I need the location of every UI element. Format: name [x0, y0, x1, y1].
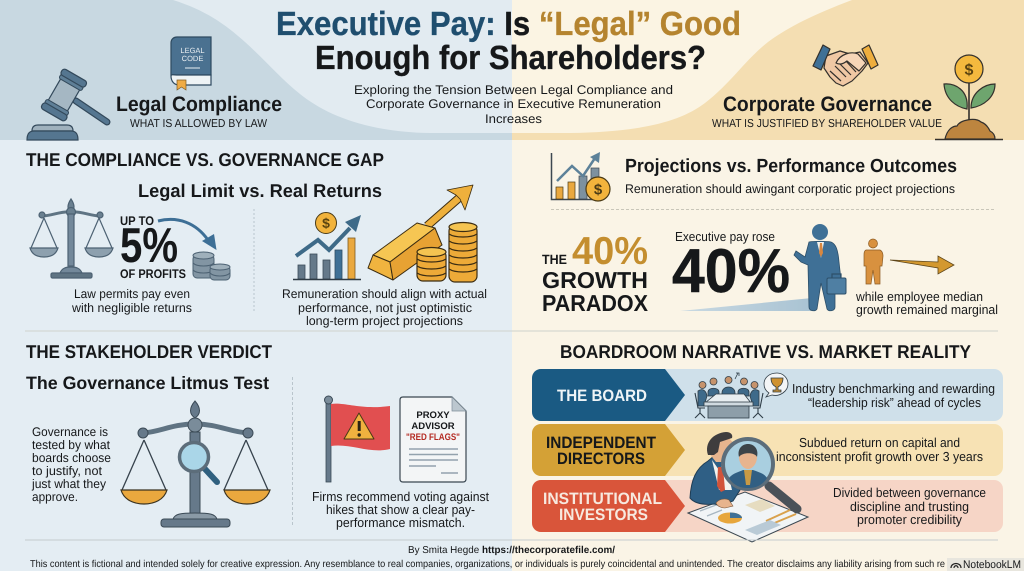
heading: stakeholder verdict: THE STAKEHOLDER VERDICT [26, 341, 273, 362]
icon: growth plant with coin: $ [965, 62, 974, 79]
subheading: governance litmus test: The Governance Litmus Test [26, 373, 269, 393]
heading: projections vs performance: Projections vs. Performance Outcomes [625, 156, 957, 177]
heading: corporate governance: WHAT IS JUSTIFIED BY SHAREHOLDER VALUE [712, 118, 942, 130]
text: governance is tested: Governance is [32, 425, 108, 439]
row: institutional investors [532, 480, 1003, 532]
title: Executive Pay: Is “Legal” Good [276, 6, 741, 43]
heading: corporate governance: Corporate Governance [723, 93, 932, 116]
icon: projections chart: $ [594, 182, 603, 198]
arrow: profits to coins [158, 219, 216, 250]
heading: the 40% growth paradox: THE [542, 252, 567, 267]
row: independent directors: DIRECTORS [557, 450, 645, 468]
panel: the stakeholder verdict [26, 341, 489, 530]
text: governance is tested: approve. [32, 490, 78, 504]
arrow: marginal growth [890, 256, 954, 274]
text: governance is tested: tested by what [32, 438, 111, 452]
text: governance is tested: to justify, not [32, 464, 103, 478]
stat: 40%: 40% [672, 237, 790, 306]
icon: board table [695, 373, 788, 418]
icon: gold coin stacks [417, 222, 477, 282]
text: firms recommend voting: Firms recommend voting against [312, 489, 489, 504]
title: Enough for Shareholders? [315, 40, 706, 77]
title [276, 6, 741, 77]
heading: the 40% growth paradox: 40% [572, 230, 648, 273]
text: executive pay rose: Executive pay rose [675, 229, 775, 244]
callout: up to 5% of profits: UP TO [120, 214, 154, 228]
heading: legal compliance [116, 93, 282, 130]
subtitle: Corporate Governance in Executive Remuneration [366, 97, 661, 111]
icon: rising bar chart with coin: $ [322, 215, 330, 231]
row: the board: “leadership risk” ahead of cycles [808, 395, 981, 410]
text: law permits pay [71, 287, 192, 315]
footer: disclaimer: This content is fictional and intended solely for creative expression. Any resemblance to real companies, organizations, or individuals is purely coincidental and unintended. The creator disclaims any liability arising from such re [30, 559, 945, 570]
heading: the 40% growth paradox [542, 230, 649, 316]
icon: proxy advisor document: PROXY [416, 410, 450, 421]
heading: compliance vs governance gap: THE COMPLIANCE VS. GOVERNANCE GAP [26, 149, 384, 170]
arrow: gold rising [427, 185, 473, 226]
callout: up to 5% of profits: 5% [120, 219, 178, 273]
text: employee median growth: while employee median [855, 289, 983, 304]
icon: gold bar [368, 223, 442, 280]
heading: the 40% growth paradox: GROWTH [542, 267, 648, 293]
icon: balance scale [30, 199, 113, 278]
chart: pay ramp wedge [680, 298, 812, 311]
panel: projections vs performance outcomes [542, 152, 998, 317]
icon: projections chart [552, 152, 610, 201]
row: institutional investors: discipline and trusting [850, 499, 969, 514]
badge: NotebookLM watermark: NotebookLM [963, 559, 1021, 571]
icon: gavel [27, 68, 107, 140]
text: remuneration projections: Remuneration should awingant corporatic project projections [625, 182, 955, 196]
icon: red flag with warning [324, 396, 390, 482]
icon: employee figure [864, 239, 883, 284]
text: remuneration should align: performance, not just optimistic [298, 301, 472, 315]
text: governance is tested: boards choose [32, 451, 111, 465]
icon: legal code book: CODE [182, 54, 203, 63]
text: governance is tested: just what they [31, 477, 107, 491]
icon: proxy advisor document: ADVISOR [411, 421, 455, 432]
subheading: legal limit vs real returns: Legal Limit vs. Real Returns [138, 180, 382, 201]
row: institutional investors: INSTITUTIONAL [543, 490, 662, 508]
heading: corporate governance [712, 93, 942, 130]
footer: byline: By Smita Hegde https://thecorporatefile.com/ [408, 545, 615, 556]
row: the board: Industry benchmarking and rewarding [792, 381, 995, 396]
text: law permits pay: with negligible returns [71, 301, 192, 315]
subtitle: Increases [485, 112, 542, 126]
icon: analyst with magnifier over report [688, 432, 808, 542]
callout: up to 5% of profits: OF PROFITS [120, 267, 186, 281]
panel: boardroom narrative vs market reality [532, 341, 1003, 542]
icon: legal code book [171, 37, 211, 90]
subtitle: Exploring the Tension Between Legal Compliance and [354, 83, 673, 97]
icon: proxy advisor document: "RED FLAGS" [406, 432, 460, 443]
icon: handshake [813, 45, 878, 86]
panel: header banner [0, 0, 1024, 140]
heading: boardroom narrative: BOARDROOM NARRATIVE VS. MARKET REALITY [560, 341, 972, 362]
heading: legal compliance: WHAT IS ALLOWED BY LAW [130, 118, 267, 130]
panel: the compliance vs governance gap [26, 149, 487, 328]
row: the board [532, 369, 1003, 421]
text: remuneration should align: Remuneration should align with actual [282, 287, 487, 301]
row: institutional investors: promoter credibility [857, 512, 962, 527]
heading: legal compliance: Legal Compliance [116, 93, 282, 116]
row: independent directors: INDEPENDENT [546, 434, 656, 452]
text: firms recommend voting: hikes that show a clear pay- [326, 502, 475, 517]
heading: the 40% growth paradox: PARADOX [542, 290, 649, 316]
text: remuneration should align [282, 287, 487, 328]
icon: proxy advisor document [400, 397, 466, 482]
row: institutional investors: INVESTORS [559, 506, 648, 524]
row: the board: THE BOARD [557, 387, 647, 405]
text: employee median growth [855, 289, 998, 317]
text: employee median growth: growth remained marginal [856, 302, 998, 317]
row: independent directors: Subdued return on capital and [799, 435, 960, 450]
icon: legal code book: LEGAL [180, 46, 205, 55]
text: firms recommend voting: performance mismatch. [336, 515, 465, 530]
icon: scale with magnifier [121, 401, 270, 527]
text: firms recommend voting [312, 489, 489, 530]
row: independent directors [532, 424, 1003, 476]
text: law permits pay: Law permits pay even [74, 287, 190, 301]
icon: grey coins [193, 252, 230, 280]
icon: growth plant with coin [935, 55, 1003, 140]
row: independent directors: inconsistent profit growth over 3 years [776, 449, 983, 464]
subtitle [354, 83, 673, 126]
icon: rising bar chart with coin [293, 212, 361, 280]
text: remuneration should align: long-term project projections [306, 314, 463, 328]
text: governance is tested [31, 425, 111, 504]
row: institutional investors: Divided between governance [833, 485, 986, 500]
icon: executive figure with briefcase [794, 224, 846, 311]
